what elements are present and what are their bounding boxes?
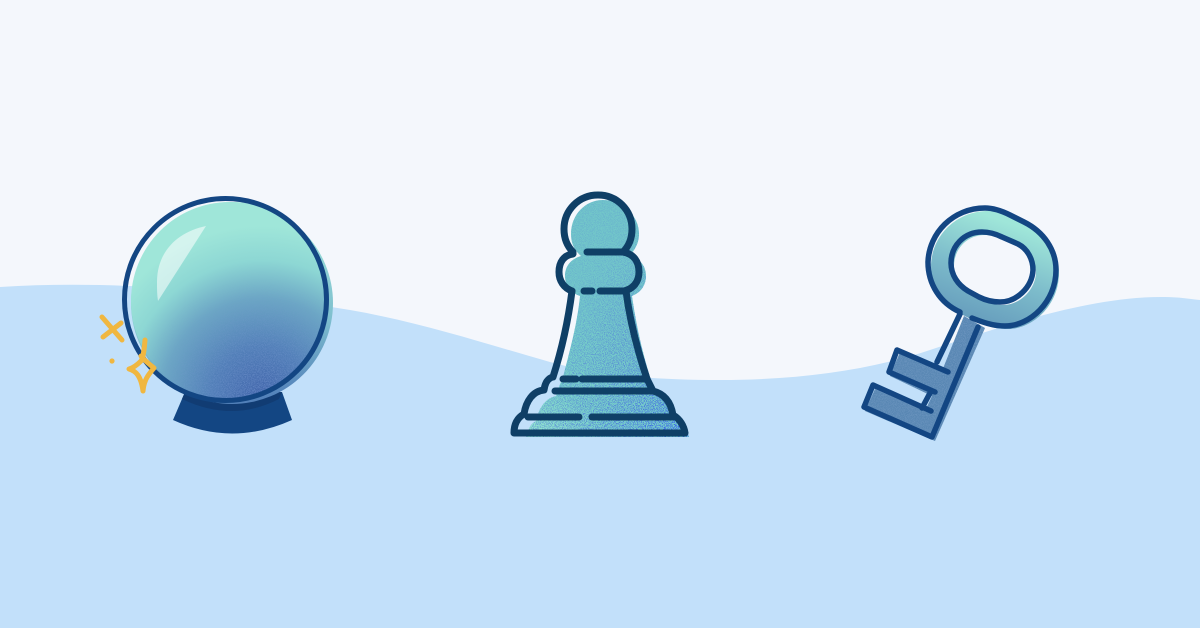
key bow fill <box>931 211 1059 329</box>
glass highlight <box>157 226 206 301</box>
bow outer ring <box>928 208 1056 326</box>
wave: light blue ground <box>0 285 1200 628</box>
pawn collar <box>559 252 639 291</box>
stand shadow <box>182 392 282 411</box>
pawn grain overlay <box>526 200 689 437</box>
shaft and teeth <box>864 314 978 437</box>
key outline <box>864 208 1056 437</box>
glass sphere <box>131 202 329 400</box>
sparkle cross <box>102 317 122 340</box>
icon: key <box>864 208 1059 441</box>
key shaft and teeth fill <box>865 316 985 441</box>
glass rim shade <box>131 202 333 404</box>
pawn base lines <box>528 379 673 417</box>
icon: chess pawn <box>514 195 689 437</box>
icon: crystal ball <box>124 198 333 434</box>
bow inner ring <box>951 232 1033 302</box>
ball stand <box>173 392 292 434</box>
icon: yellow sparkles <box>102 317 154 391</box>
glass grain <box>131 202 329 400</box>
pawn fill <box>526 200 689 437</box>
key shaft grain <box>865 316 985 441</box>
pawn body sides <box>514 291 685 433</box>
ball outline <box>124 198 326 400</box>
sparkle star <box>129 340 154 391</box>
pawn outline <box>514 195 685 433</box>
pawn head <box>564 195 632 252</box>
sparkle dot <box>110 359 114 363</box>
key hole <box>954 235 1036 305</box>
